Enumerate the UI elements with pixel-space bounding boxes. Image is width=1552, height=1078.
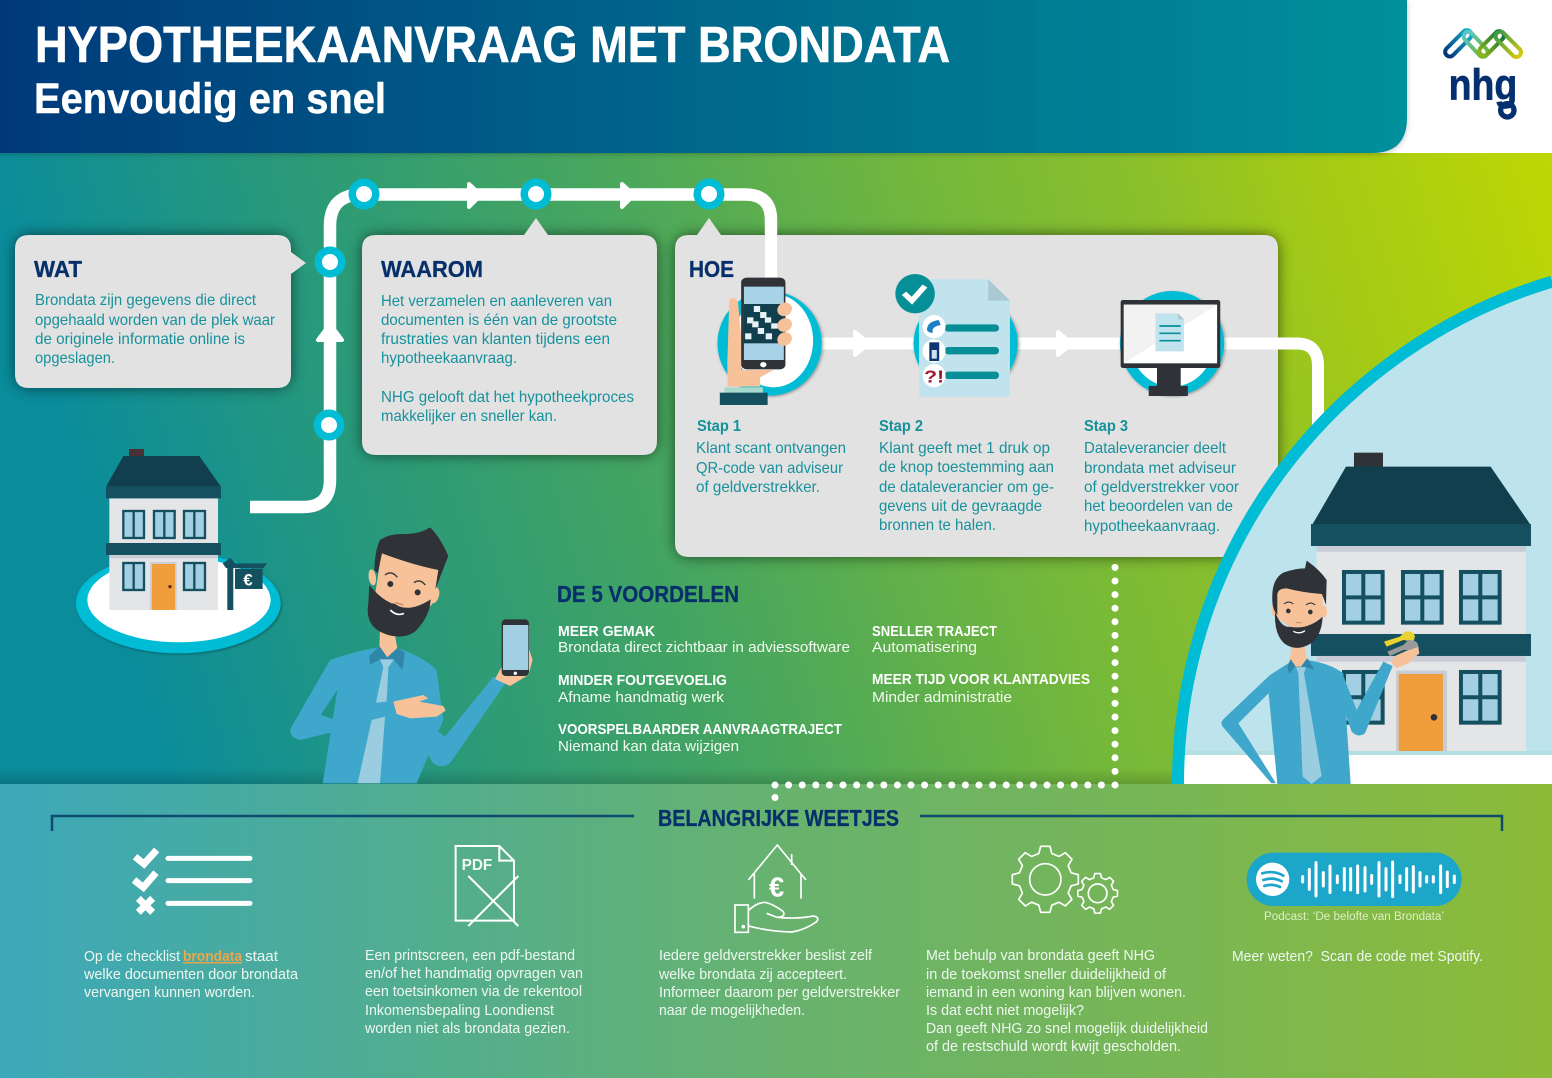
list: voordelen column 1: Afname handmatig werk (558, 689, 725, 706)
main gradient background (0, 153, 1552, 784)
list: voordelen column 1: Brondata direct zichtbaar in adviessoftware (558, 639, 850, 656)
text: WAT body: opgeslagen. (35, 350, 115, 367)
text: checklist: Op de checklist (84, 949, 180, 965)
step 1 text: Klant scant ontvangen (696, 440, 846, 457)
text: NHG toekomst (926, 948, 1208, 1055)
text: checklist: brondata (183, 949, 243, 965)
text: checklist: staat (245, 949, 278, 965)
step 2 text: Klant geeft met 1 druk op (879, 440, 1050, 457)
heading bracket (52, 816, 1502, 831)
text: pdf: en/of het handmatig opvragen van (365, 966, 583, 982)
text: pdf: een toetsinkomen via de rekentool (365, 984, 582, 1000)
step 2 text: Stap 2 (879, 418, 923, 435)
text: WAT body: opgehaald worden van de plek waar (35, 312, 276, 329)
panel shadows (15, 235, 1278, 557)
icon: document with data sources (895, 274, 1018, 397)
text: WAAROM body (381, 293, 634, 425)
step 3 text: Dataleverancier deelt (1084, 440, 1227, 457)
text: WAAROM body: frustraties van klanten tijdens een (381, 331, 610, 348)
list: voordelen column 1: VOORSPELBAARDER AANVRAAGTRAJECT (558, 721, 842, 738)
text: pdf: Inkomensbepaling Loondienst (365, 1003, 554, 1019)
route line over HOE panel (765, 222, 777, 300)
icon: gears (1012, 846, 1117, 913)
header banner (0, 0, 1552, 153)
heading: belangrijke weetjes: BELANGRIJKE WEETJES (658, 805, 899, 831)
logo: nhg: nhg (1449, 60, 1517, 109)
step 2 text: gevens uit de gevraagde (879, 498, 1042, 515)
step 1 text: Stap 1 (697, 418, 741, 435)
list: voordelen column 2: SNELLER TRAJECT (872, 623, 997, 640)
illustration: presenting man with phone (290, 527, 533, 783)
panel: HOE (675, 218, 1278, 557)
text: geldverstrekker: naar de mogelijkheden. (659, 1003, 805, 1019)
route arrows (318, 184, 1072, 355)
illustration: start house on disc (76, 449, 281, 653)
list: voordelen column 1: MEER GEMAK (558, 623, 655, 640)
step 2 text: de knop toestemming aan (879, 459, 1054, 476)
step 1 text: QR-code van adviseur (696, 460, 844, 477)
route line through steps (815, 344, 1318, 440)
step 3 text: of geldverstrekker voor (1084, 479, 1240, 496)
list: voordelen column 1 (558, 623, 850, 755)
icon: crossed-out pdf (456, 846, 518, 926)
illustration: start house on disc: € (243, 570, 253, 589)
text: NHG toekomst: Dan geeft NHG zo snel mogelijk duidelijkheid (926, 1021, 1208, 1037)
text: NHG toekomst: Met behulp van brondata geeft NHG (926, 948, 1155, 964)
logo: nhg (1443, 28, 1523, 117)
text: pdf: worden niet als brondata gezien. (364, 1021, 570, 1037)
text: WAT body: de originele informatie online is (35, 331, 245, 348)
icon: house in hand with euro: € (769, 872, 784, 903)
text: checklist: welke documenten door brondata (83, 967, 299, 983)
text: WAAROM body: documenten is één van de grootste (381, 312, 617, 329)
dotted connector (774, 562, 1115, 798)
heading: de 5 voordelen: DE 5 VOORDELEN (557, 581, 739, 607)
subtitle: Eenvoudig en snel (34, 75, 386, 123)
text: checklist (83, 949, 299, 1001)
text: WAT body: Brondata zijn gegevens die direct (35, 292, 257, 309)
text: NHG toekomst: Is dat echt niet mogelijk? (926, 1003, 1084, 1019)
text: pdf: Een printscreen, een pdf-bestand (365, 948, 575, 964)
caption: podcast: Podcast: ‘De belofte van Brondata’ (1264, 911, 1444, 923)
text: geldverstrekker: welke brondata zij accepteert. (658, 967, 847, 983)
heading: WAT: WAT (34, 256, 82, 282)
step 3 text: het beoordelen van de (1084, 498, 1233, 515)
HOE heading: HOE (689, 256, 734, 282)
text: NHG toekomst: of de restschuld wordt kwijt gescholden. (926, 1039, 1181, 1055)
step 1 text: of geldverstrekker. (696, 479, 820, 496)
white route line upper (250, 194, 771, 507)
text: WAAROM body: Het verzamelen en aanleveren van (381, 293, 612, 310)
step 2 text: bronnen te halen. (879, 517, 996, 534)
step 2 text (879, 418, 1054, 534)
text: WAAROM body: hypotheekaanvraag. (381, 350, 517, 367)
step 3 text: Stap 3 (1084, 418, 1128, 435)
list: voordelen column 2: Minder administratie (872, 689, 1012, 706)
speech box: WAAROM (362, 218, 657, 455)
speech box: WAT (15, 235, 306, 388)
step 2 text: de dataleverancier om ge- (879, 479, 1054, 496)
icon: hand with phone (717, 278, 822, 405)
list: voordelen column 2: MEER TIJD VOOR KLANTADVIES (872, 671, 1090, 688)
icon: crossed-out pdf: PDF (462, 857, 492, 874)
icon: checklist (134, 850, 250, 912)
list: voordelen column 1: MINDER FOUTGEVOELIG (558, 672, 727, 689)
title: HYPOTHEEKAANVRAAG MET BRONDATA (35, 16, 950, 73)
man with keys (1221, 561, 1419, 784)
step 1 text (696, 418, 846, 496)
text: geldverstrekker (658, 948, 900, 1019)
heading: WAAROM: WAAROM (381, 256, 483, 282)
icon: document with data sources: ?! (924, 367, 944, 387)
route markers (314, 178, 724, 440)
text: geldverstrekker: Iedere geldverstrekker beslist zelf (659, 948, 873, 964)
icon: spotify code (1247, 853, 1462, 906)
icon: monitor with document (1120, 291, 1224, 396)
list: voordelen column 1: Niemand kan data wijzigen (558, 738, 739, 755)
text: WAT body (35, 292, 276, 367)
text: WAAROM body: NHG gelooft dat het hypotheekproces (381, 389, 634, 406)
step 3 text (1084, 418, 1240, 535)
text: checklist: vervangen kunnen worden. (84, 985, 255, 1001)
step 3 text: hypotheekaanvraag. (1084, 518, 1220, 535)
text: geldverstrekker: Informeer daarom per geldverstrekker (659, 985, 900, 1001)
text: spotify: Meer weten? Scan de code met Spotify. (1232, 949, 1483, 965)
list: voordelen column 2: Automatisering (872, 639, 977, 656)
icon: house in hand with euro (735, 845, 818, 932)
text: NHG toekomst: iemand in een woning kan blijven wonen. (926, 985, 1186, 1001)
illustration: light circle with house and man (1178, 282, 1552, 784)
text: WAAROM body: makkelijker en sneller kan. (381, 408, 557, 425)
list: voordelen column 2 (872, 623, 1090, 706)
bottom section background (0, 784, 1552, 1078)
step 3 text: brondata met adviseur (1084, 460, 1237, 477)
text: NHG toekomst: in de toekomst sneller duidelijkheid of (926, 967, 1167, 983)
text: pdf (364, 948, 583, 1037)
